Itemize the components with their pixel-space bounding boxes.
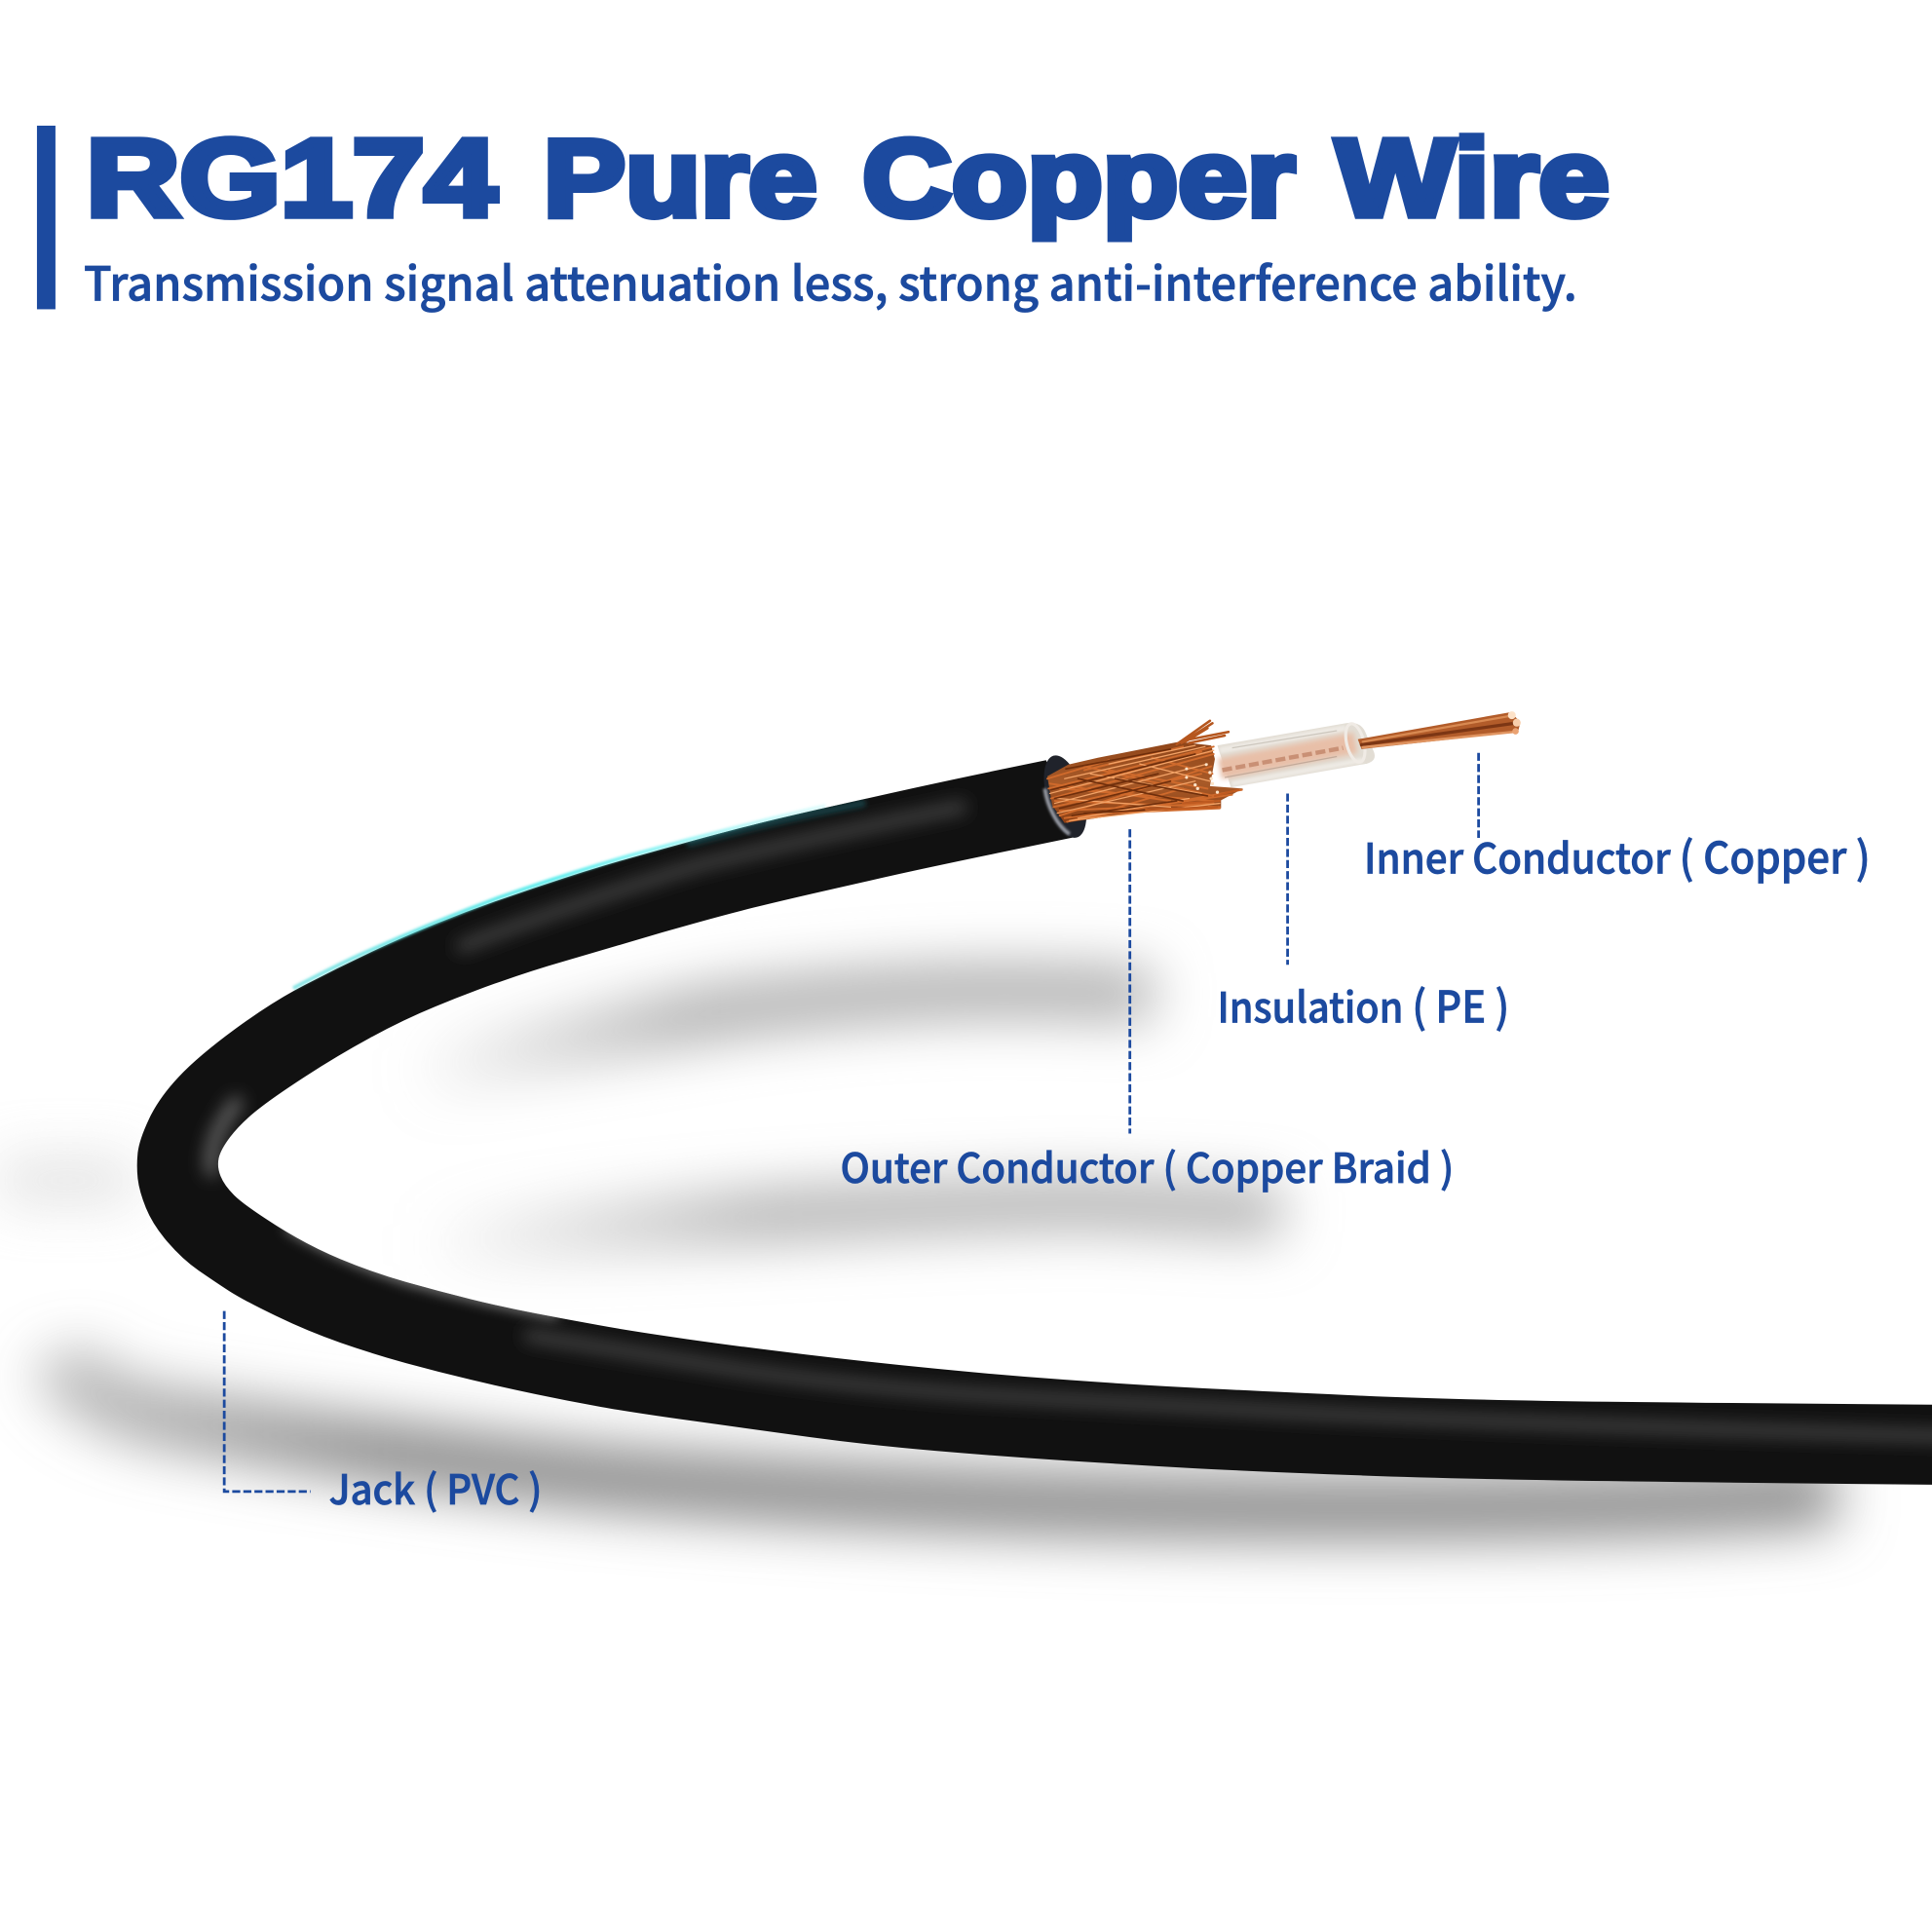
panel: title block bbox=[37, 116, 1610, 315]
title: Copper bbox=[862, 116, 1295, 239]
inner copper conductor bbox=[1358, 711, 1521, 749]
subtitle: Transmission signal attenuation less, strong anti-interference ability. bbox=[84, 246, 1577, 315]
shadow: lower cable shadow on ground bbox=[0, 1181, 1836, 1508]
insulation PE bbox=[1217, 722, 1375, 787]
title: RG174 bbox=[87, 116, 497, 239]
callout: jacket bbox=[224, 1311, 542, 1517]
callout: insulation: Insulation ( PE ) bbox=[1217, 972, 1509, 1036]
callout: jacket: Jack ( PVC ) bbox=[329, 1458, 542, 1517]
outer copper braid bbox=[1047, 721, 1243, 823]
shadow: upper reflections inside the curve bbox=[419, 991, 1281, 1247]
title: Wire bbox=[1336, 116, 1610, 239]
teal rim light bbox=[293, 806, 825, 988]
accent bar bbox=[37, 126, 56, 309]
title bbox=[87, 116, 1610, 239]
title: Pure bbox=[544, 116, 816, 239]
callout: outer conductor: Outer Conductor ( Copper Braid ) bbox=[841, 1137, 1454, 1195]
cable end ring bbox=[1036, 750, 1095, 843]
callout: inner conductor: Inner Conductor ( Copper ) bbox=[1364, 823, 1871, 887]
cable jacket bbox=[137, 760, 1932, 1485]
